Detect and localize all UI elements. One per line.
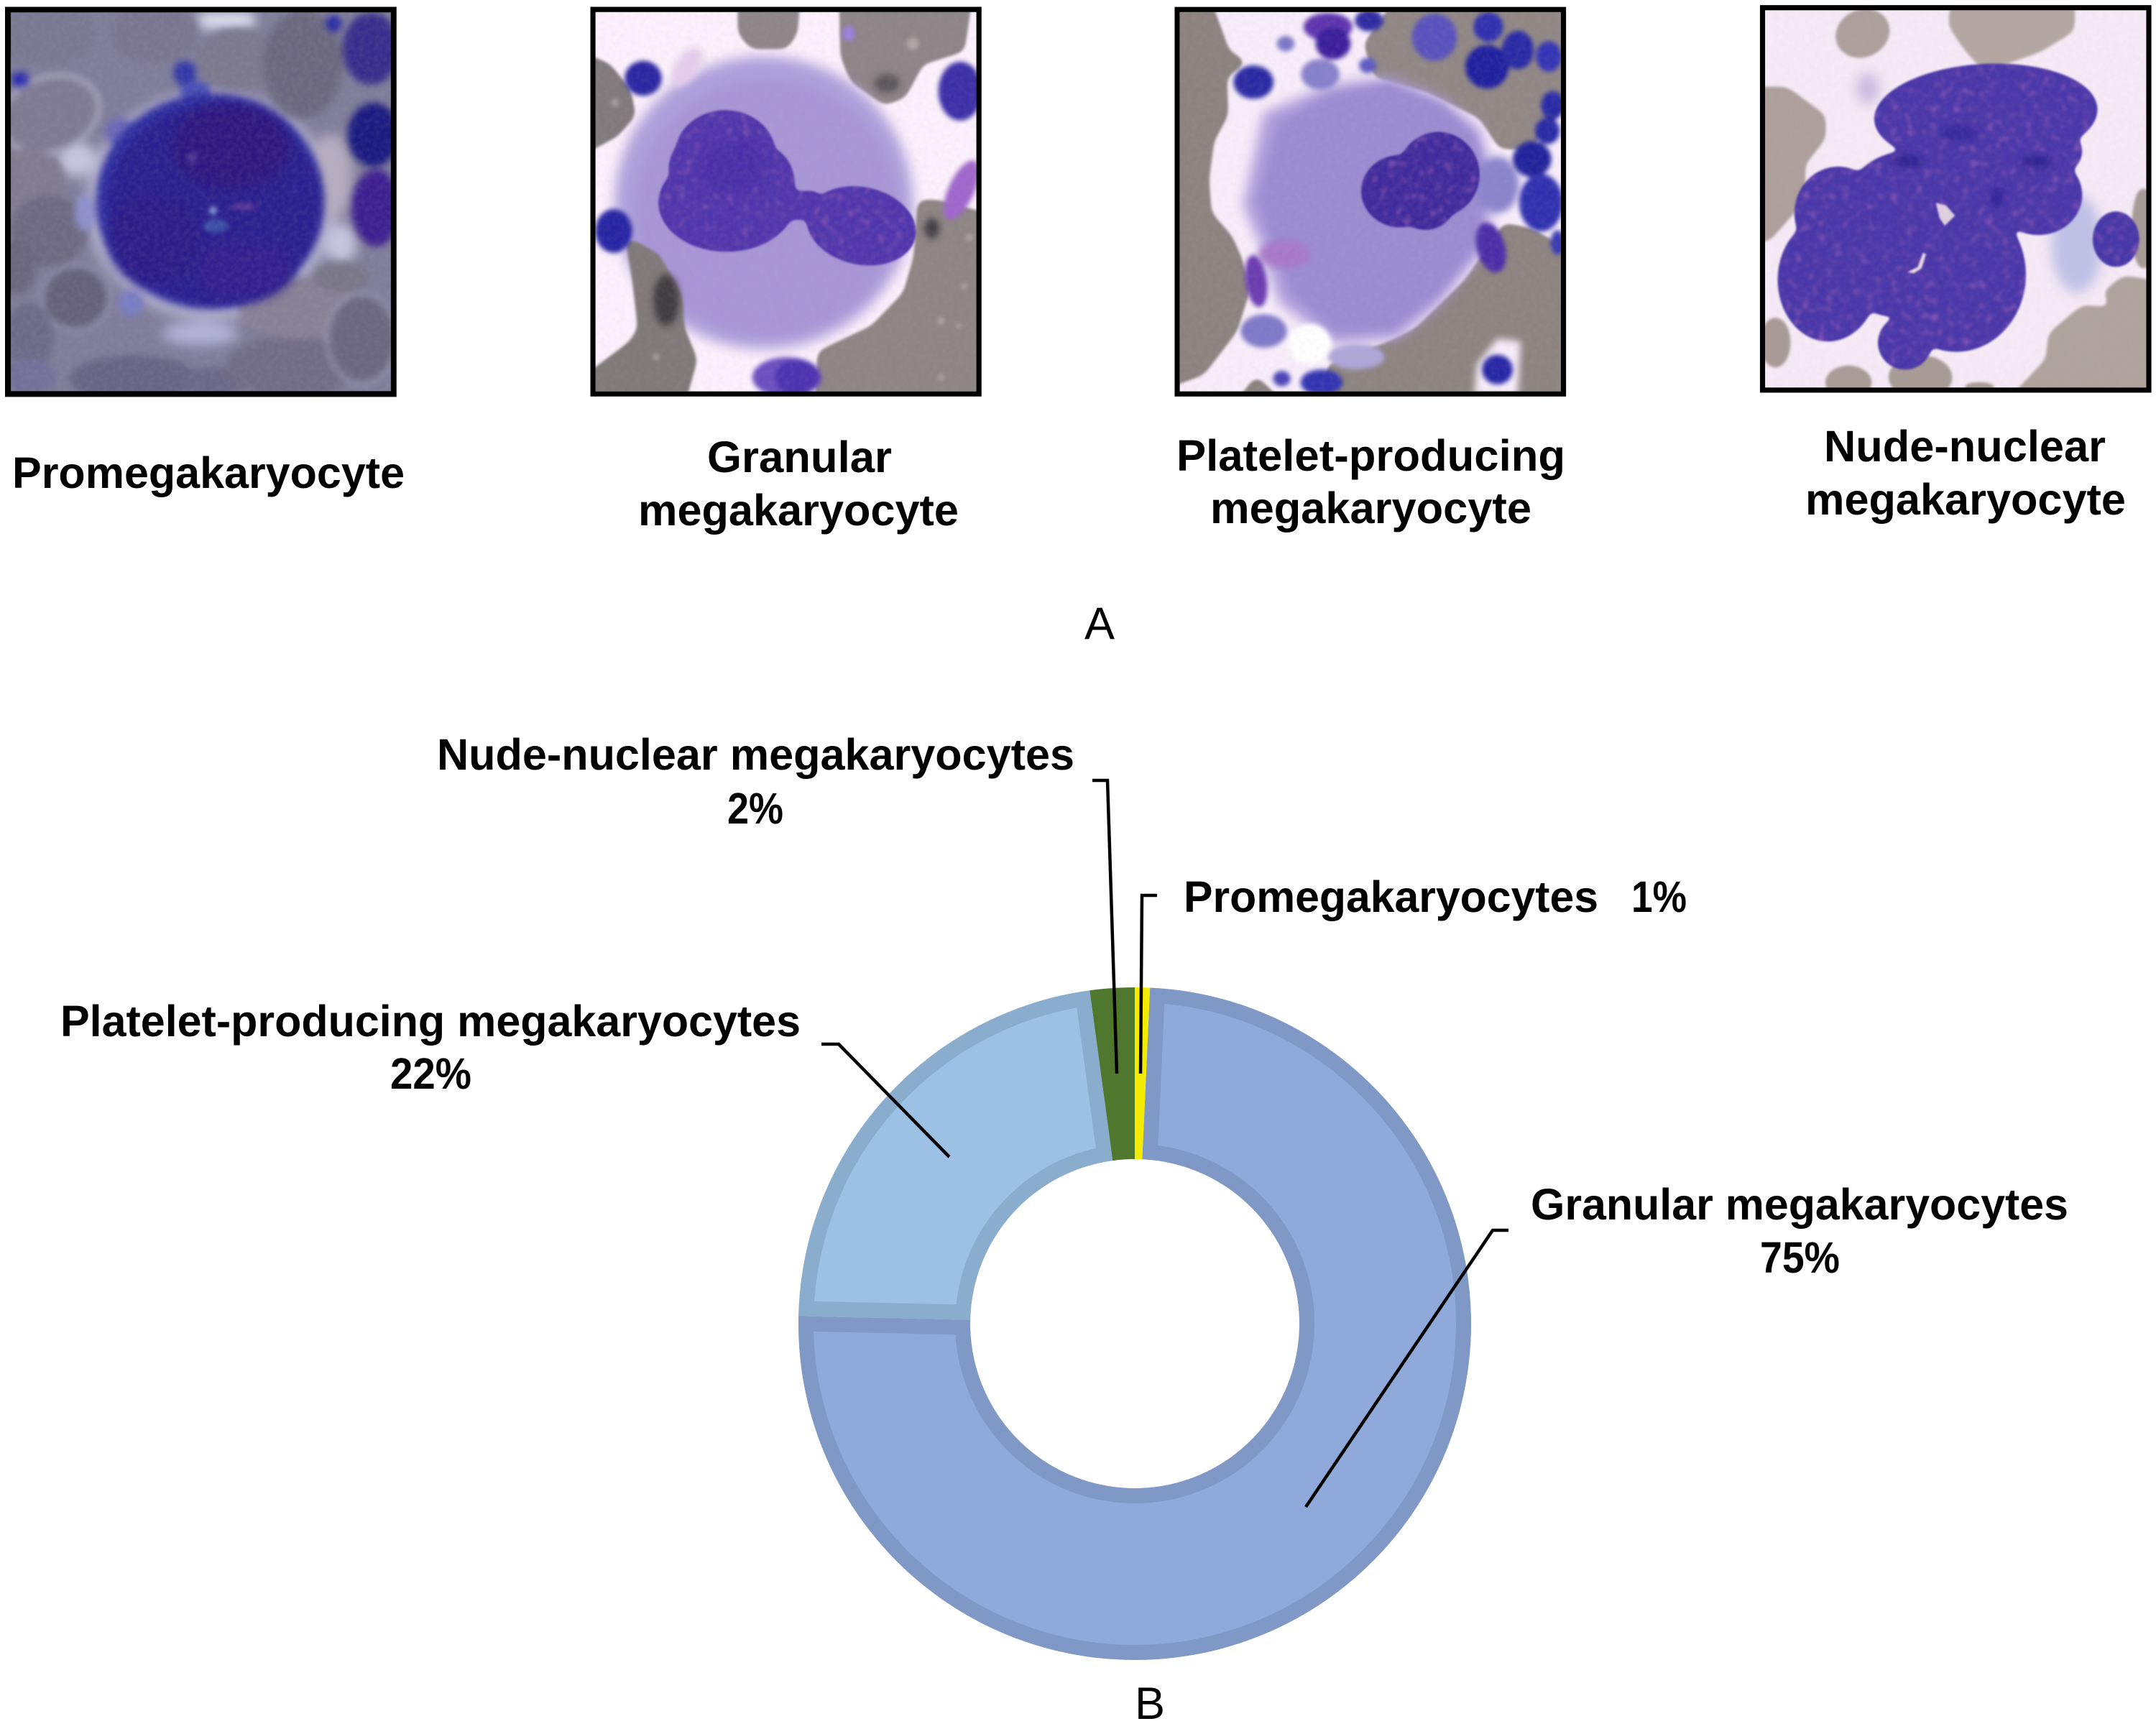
leader line: promegakaryocytes [1141, 895, 1157, 1074]
panel: platelet-producing megakaryocyte micrograph [1161, 0, 1577, 405]
chart label: promegakaryocytes 1%: 1% [1631, 872, 1687, 921]
chart label: nude-nuclear 2% [437, 730, 1074, 833]
chart label: granular 75% [1531, 1180, 2068, 1282]
label: Promegakaryocyte: Promegakaryocyte [12, 448, 405, 497]
donut chart [798, 987, 1471, 1660]
panel: promegakaryocyte micrograph [0, 1, 400, 402]
label: Platelet-producing megakaryocyte [1176, 431, 1565, 532]
label: Nude-nuclear megakaryocyte: megakaryocyte [1805, 475, 2126, 524]
leader line: granular [1306, 1230, 1508, 1507]
label: Granular megakaryocyte: megakaryocyte [638, 486, 959, 535]
panel letter B: B [1135, 1679, 1165, 1729]
chart label: granular 75%: 75% [1760, 1233, 1840, 1282]
panel: nude-nuclear megakaryocyte micrograph [1746, 0, 2156, 405]
panel letter A: A [1084, 599, 1115, 649]
chart label: nude-nuclear 2%: 2% [727, 784, 783, 833]
slice: promegakaryocytes 1% [1135, 987, 1150, 1159]
slice: nude-nuclear 2% [1089, 987, 1135, 1161]
label: Granular megakaryocyte [638, 433, 959, 535]
chart label: promegakaryocytes 1%: Promegakaryocytes [1184, 872, 1598, 921]
slice: granular 75% [798, 987, 1471, 1660]
label: Granular megakaryocyte: Granular [707, 433, 892, 481]
slice: platelet-producing 22% [798, 990, 1112, 1320]
chart label: platelet-producing 22%: 22% [390, 1049, 471, 1098]
chart label: platelet-producing 22%: Platelet-producing megakaryocytes [60, 997, 801, 1046]
chart label: platelet-producing 22% [60, 997, 801, 1098]
leader line: platelet-producing [821, 1044, 949, 1157]
label: Nude-nuclear megakaryocyte [1805, 422, 2126, 524]
panel: granular megakaryocyte micrograph [579, 0, 995, 405]
chart label: granular 75%: Granular megakaryocytes [1531, 1180, 2068, 1229]
leader line: nude-nuclear [1092, 780, 1117, 1074]
label: Platelet-producing megakaryocyte: Platelet-producing [1176, 431, 1565, 480]
label: Nude-nuclear megakaryocyte: Nude-nuclear [1824, 422, 2106, 471]
chart label: nude-nuclear 2%: Nude-nuclear megakaryocytes [437, 730, 1074, 779]
label: Platelet-producing megakaryocyte: megakaryocyte [1210, 484, 1531, 532]
